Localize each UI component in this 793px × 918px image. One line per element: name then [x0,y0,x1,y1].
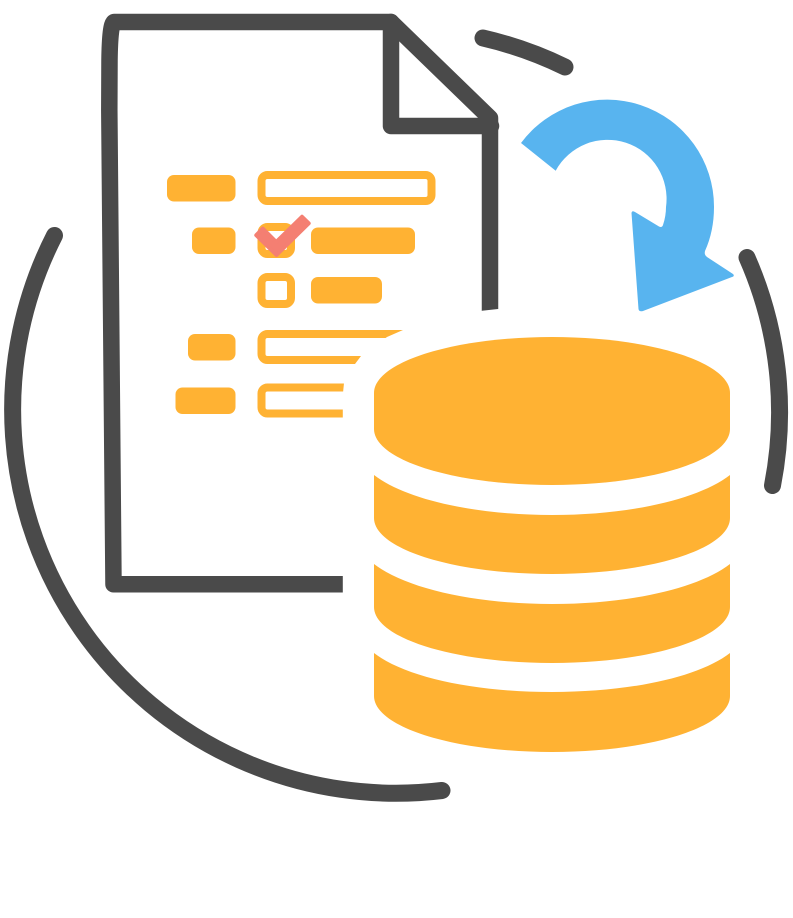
database bottom disk [374,653,730,752]
white halo behind database [343,305,740,770]
circular ring segments [13,38,780,793]
form row 5 [176,388,452,414]
form row 4 [188,334,452,360]
form row 3 with empty box [262,277,382,304]
database second disk [374,475,730,574]
form row 1 [167,175,432,202]
icon: red check mark [256,217,309,255]
database third disk [374,564,730,663]
arrow: blue curved arrow [521,100,734,311]
database top disk [374,337,730,485]
form row 2 with checked box [192,217,415,255]
database cylinder [374,337,730,752]
checklist form [167,175,452,414]
document outline [109,22,491,584]
